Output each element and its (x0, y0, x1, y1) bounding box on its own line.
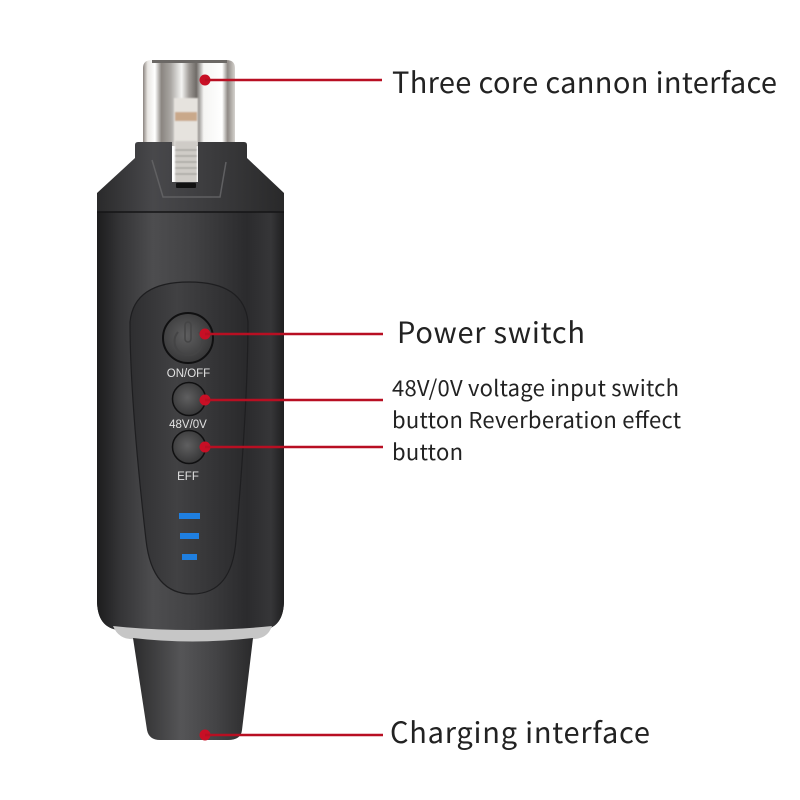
callout: voltage and reverb buttons: button (392, 435, 463, 467)
power button (163, 313, 213, 363)
callout: cannon interface (200, 60, 777, 102)
callout: charging interface (200, 710, 650, 752)
EFF button (172, 430, 206, 464)
control panel (130, 282, 248, 594)
callout: power switch (200, 310, 585, 352)
callout: voltage and reverb buttons: button Reverberation effect (392, 403, 681, 435)
product body (97, 142, 284, 630)
callout: voltage and reverb buttons (200, 371, 681, 467)
48V button (172, 382, 206, 416)
charging plug (133, 638, 253, 740)
callout: charging interface: Charging interface (390, 710, 650, 752)
callout: power switch: Power switch (397, 310, 585, 352)
label: on/off: ON/OFF (167, 368, 210, 380)
XLR metal connector (143, 60, 235, 184)
label: 48V/0V: 48V/0V (169, 419, 207, 431)
blue LEDs (179, 513, 200, 560)
label: EFF: EFF (177, 471, 199, 483)
callout: voltage and reverb buttons: 48V/0V voltage input switch (392, 371, 679, 403)
silver ring (113, 626, 272, 642)
callout: cannon interface: Three core cannon interface (392, 60, 777, 102)
